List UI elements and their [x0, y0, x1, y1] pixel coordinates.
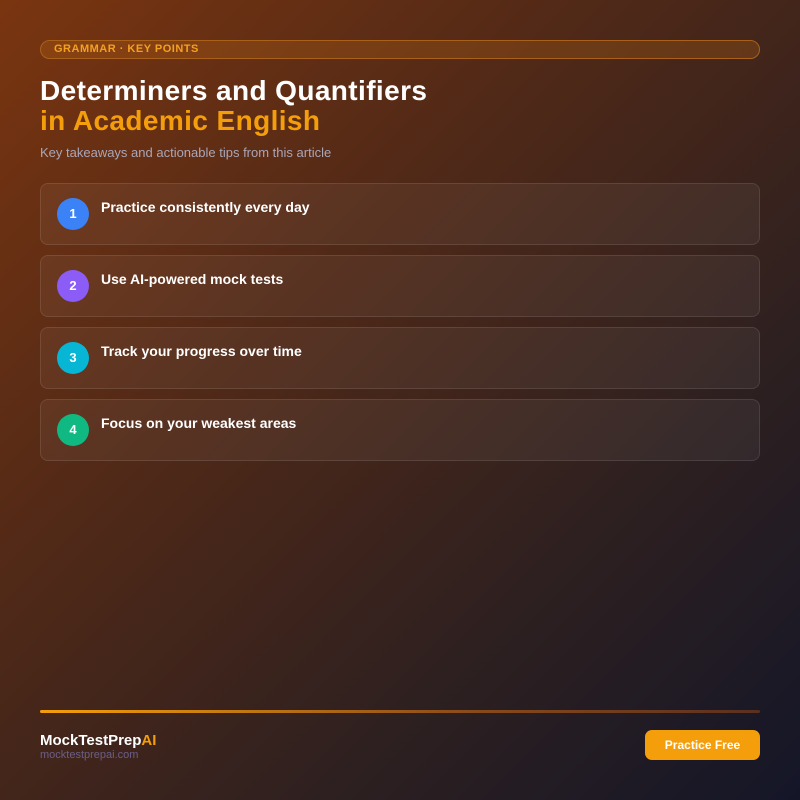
icon: number 4: 4: [69, 422, 77, 437]
icon: number 4: [57, 414, 89, 446]
tag: category label: [40, 40, 760, 59]
card 1: [40, 183, 760, 245]
button: practice free: Practice Free: [665, 738, 740, 752]
title line 2: in Academic English: [40, 105, 320, 136]
icon: number 2: 2: [69, 278, 77, 293]
brand url: mocktestprepai.com: [40, 749, 138, 761]
card 4: [40, 399, 760, 461]
brand name: MockTestPrepAI: [40, 732, 156, 749]
button: practice free: [645, 730, 760, 760]
card 3: [40, 327, 760, 389]
title line 1: Determiners and Quantifiers: [40, 75, 427, 106]
icon: number 3: 3: [69, 350, 77, 365]
icon: number 2: [57, 270, 89, 302]
icon: number 1: 1: [69, 206, 77, 221]
card 2: [40, 255, 760, 317]
icon: number 3: [57, 342, 89, 374]
card text 2: Use AI-powered mock tests: [101, 271, 283, 287]
subtitle: Key takeaways and actionable tips from this article: [40, 145, 331, 160]
card text 4: Focus on your weakest areas: [101, 415, 296, 431]
card text 3: Track your progress over time: [101, 343, 302, 359]
card text 1: Practice consistently every day: [101, 199, 310, 215]
tag: category label: GRAMMAR · KEY POINTS: [54, 43, 199, 55]
icon: number 1: [57, 198, 89, 230]
